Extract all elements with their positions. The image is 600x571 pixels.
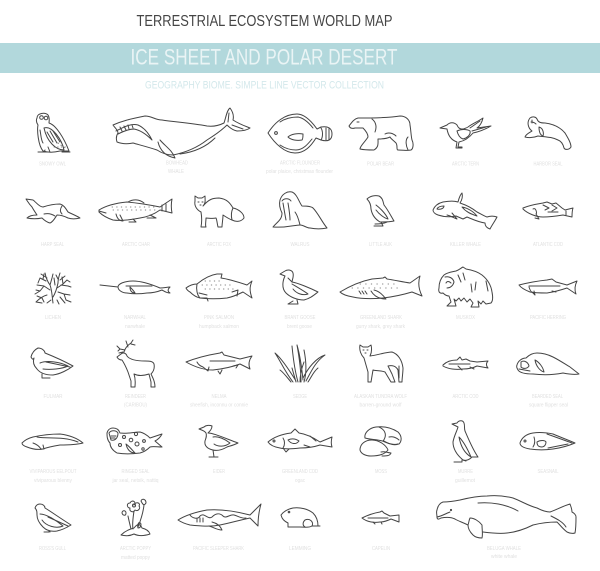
reindeer <box>117 340 155 408</box>
eider <box>199 425 238 475</box>
pacific herring: PACIFIC HERRING <box>530 315 566 321</box>
murre <box>452 421 478 484</box>
pacific herring <box>519 279 577 321</box>
ringed seal <box>107 428 162 484</box>
greenland cod <box>268 429 332 484</box>
subtitle: GEOGRAPHY BIOME. SIMPLE LINE VECTOR COLLECTION <box>145 80 384 92</box>
viviparous eelpout: VIVIPAROUS EELPOUT <box>30 469 77 475</box>
beluga whale <box>437 496 576 560</box>
pink salmon: humpback salmon <box>199 324 239 330</box>
brant goose <box>280 270 318 330</box>
arctic tern: ARCTIC TERN <box>452 162 479 168</box>
bowhead whale: BOWHEAD <box>166 160 188 166</box>
arctic fox: ARCTIC FOX <box>207 242 231 248</box>
lichen: LICHEN <box>45 315 61 321</box>
lichen <box>35 273 71 321</box>
pacific sleeper shark: PACIFIC SLEEPER SHARK <box>193 546 244 552</box>
muskox: MUSKOX <box>456 315 475 321</box>
title: TERRESTRIAL ECOSYSTEM WORLD MAP <box>136 13 392 30</box>
fulmar <box>31 348 73 400</box>
ringed seal: RINGED SEAL <box>122 469 150 475</box>
murre: MURRE <box>458 469 473 475</box>
bowhead whale: WHALE <box>168 169 184 175</box>
alaskan tundra wolf: ALASKAN TUNDRA WOLF <box>354 394 407 400</box>
murre: guillemot <box>455 478 475 484</box>
sedge <box>275 345 325 400</box>
arctic cod: ARCTIC COD <box>452 394 478 400</box>
snowy owl <box>36 113 70 168</box>
nelma: sheefish, inconnu or connie <box>190 402 248 408</box>
ross's gull: ROSS'S GULL <box>39 546 67 552</box>
arctic char <box>99 199 172 248</box>
seasnail: SEASNAIL <box>538 469 559 475</box>
fulmar: FULMAR <box>44 394 62 400</box>
lemming: LEMMING <box>289 546 311 552</box>
greenland cod: ogac <box>295 478 305 484</box>
capelin <box>362 511 399 552</box>
polar bear: POLAR BEAR <box>367 162 394 168</box>
killer whale: KILLER WHALE <box>450 242 481 248</box>
moss <box>360 427 401 475</box>
beluga whale: BELUGA WHALE <box>487 546 521 552</box>
greenland shark: gurry shark, grey shark <box>356 324 405 330</box>
nelma <box>186 352 252 408</box>
arctic flounder <box>266 114 333 175</box>
walrus <box>273 192 327 248</box>
arctic char: ARCTIC CHAR <box>122 242 150 248</box>
bearded seal <box>517 353 579 408</box>
viviparous eelpout <box>22 434 83 484</box>
viviparous eelpout: viviparous blenny <box>34 478 72 484</box>
atlantic cod <box>523 202 573 248</box>
eider: EIDER <box>213 469 225 475</box>
reindeer: REINDEER <box>125 394 146 400</box>
banner <box>0 43 600 73</box>
arctic cod <box>443 357 488 400</box>
bearded seal: square flipper seal <box>529 402 568 408</box>
bowhead whale <box>113 108 250 175</box>
arctic tern <box>440 118 491 168</box>
harp seal: HARP SEAL <box>41 242 65 248</box>
harbor seal: HARBOR SEAL <box>534 162 563 168</box>
ross's gull <box>35 504 71 552</box>
greenland cod: GREENLAND COD <box>282 469 318 475</box>
arctic poppy <box>120 499 151 561</box>
pink salmon <box>186 274 252 330</box>
bearded seal: BEARDED SEAL <box>532 394 564 400</box>
brant goose: BRANT GOOSE <box>284 315 316 321</box>
ringed seal: jar seal, netsik, nattiq <box>112 478 158 484</box>
muskox <box>439 267 493 321</box>
moss: MOSS <box>375 469 387 475</box>
beluga whale: white whale <box>490 554 517 560</box>
seasnail <box>520 433 575 475</box>
nelma: NELMA <box>212 394 227 400</box>
greenland shark: GREENLAND SHARK <box>360 315 402 321</box>
brant goose: brent goose <box>287 324 312 330</box>
polar bear <box>349 116 413 168</box>
alaskan tundra wolf <box>354 345 407 408</box>
arctic poppy: ARCTIC POPPY <box>120 546 151 552</box>
capelin: CAPELIN <box>372 546 390 552</box>
killer whale <box>433 193 497 248</box>
harbor seal <box>525 117 571 168</box>
walrus: WALRUS <box>290 242 310 248</box>
narwhal <box>100 281 170 330</box>
banner: ICE SHEET AND POLAR DESERT <box>130 44 398 70</box>
arctic flounder: polar plaice, christmas flounder <box>266 169 333 175</box>
harp seal <box>26 199 80 248</box>
arctic flounder: ARCTIC FLOUNDER <box>280 160 320 166</box>
lemming <box>281 508 320 552</box>
pink salmon: PINK SALMON <box>204 315 234 321</box>
sedge: SEDGE <box>293 394 307 400</box>
narwhal: narwhale <box>125 324 145 330</box>
reindeer: (CARIBOU) <box>124 402 147 408</box>
snowy owl: SNOWY OWL <box>39 162 67 168</box>
pacific sleeper shark <box>178 504 261 552</box>
alaskan tundra wolf: barren-ground wolf <box>360 402 402 408</box>
narwhal: NARWHAL <box>124 315 147 321</box>
arctic fox <box>195 196 244 248</box>
atlantic cod: ATLANTIC COD <box>533 242 563 248</box>
greenland shark <box>340 276 422 330</box>
little auk: LITTLE AUK <box>369 242 392 248</box>
little auk <box>367 196 394 248</box>
arctic poppy: matted poppy <box>121 555 150 561</box>
